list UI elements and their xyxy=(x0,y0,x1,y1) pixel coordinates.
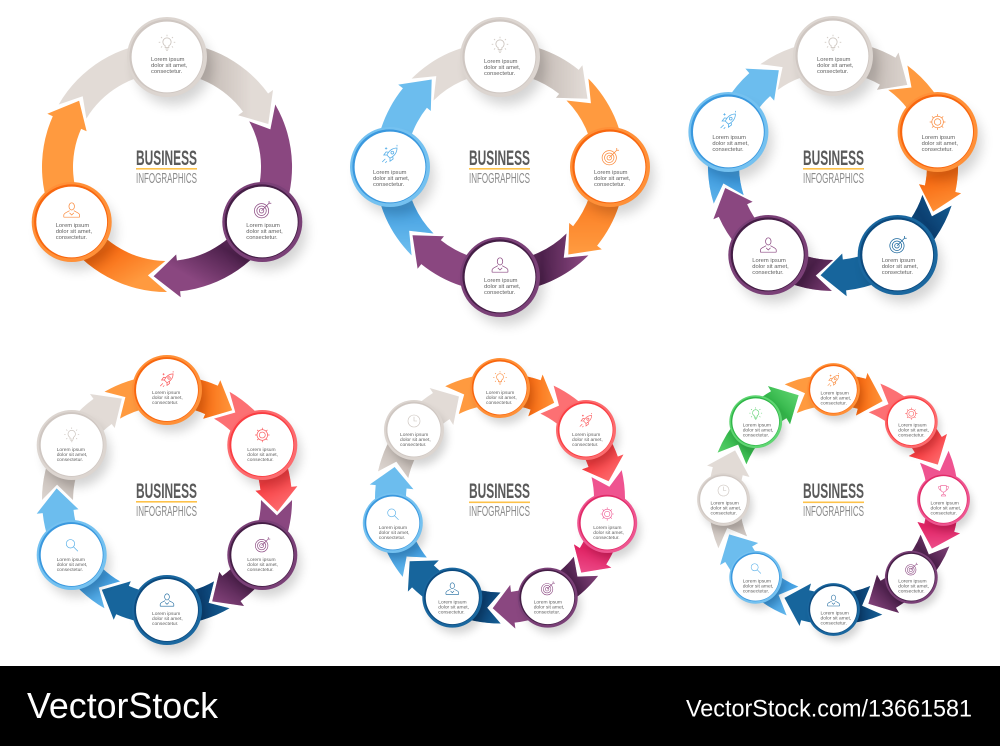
panel: six-step cycle xyxy=(26,355,308,652)
heading: business infographics: INFOGRAPHICS xyxy=(136,171,197,187)
node: rocket: dolor sit amet, xyxy=(820,396,851,402)
node: user: Lorem ipsum xyxy=(484,278,518,284)
node: bulb: consectetur. xyxy=(57,457,83,463)
node: clock: consectetur. xyxy=(710,510,737,516)
node: clock: dolor sit amet, xyxy=(710,506,741,512)
arrow ring: four arrows xyxy=(375,42,625,292)
node: clock xyxy=(697,473,753,531)
node: search: Lorem ipsum xyxy=(57,557,85,563)
image url text: VectorStock.com/13661581 xyxy=(686,696,972,722)
heading: business infographics: INFOGRAPHICS xyxy=(469,504,530,520)
node: target: dolor sit amet, xyxy=(882,264,918,270)
arrow ring: five arrows xyxy=(708,47,961,296)
node: bulb: consectetur. xyxy=(151,69,183,75)
node: bulb: Lorem ipsum xyxy=(743,423,771,429)
node: bulb: Lorem ipsum xyxy=(484,59,518,65)
node: gear: Lorem ipsum xyxy=(898,423,927,429)
node: bulb: consectetur. xyxy=(817,69,849,75)
node: user: dolor sit amet, xyxy=(152,616,183,622)
heading: business infographics: BUSINESS xyxy=(803,147,864,170)
node: rocket: Lorem ipsum xyxy=(152,390,180,396)
panel: four-step cycle xyxy=(350,17,654,325)
node: user xyxy=(32,182,116,270)
arrow: dark blue xyxy=(102,581,230,625)
node: user: Lorem ipsum xyxy=(820,610,849,616)
node: rocket: dolor sit amet, xyxy=(712,141,749,147)
heading: business infographics: BUSINESS xyxy=(803,480,864,503)
node: rocket: consectetur. xyxy=(152,400,178,406)
heading: business infographics: INFOGRAPHICS xyxy=(803,504,864,520)
node: user: Lorem ipsum xyxy=(752,258,786,264)
node: user xyxy=(460,237,544,325)
arrow: purple xyxy=(212,500,292,606)
node: target: Lorem ipsum xyxy=(247,557,276,563)
heading: business infographics: BUSINESS xyxy=(136,147,197,170)
node: gear: consectetur. xyxy=(247,457,274,463)
node: user: dolor sit amet, xyxy=(752,264,789,270)
arrow: light blue xyxy=(370,467,427,577)
node: target: consectetur. xyxy=(594,182,626,188)
arrow: beige xyxy=(760,47,908,90)
node: bulb xyxy=(729,395,785,453)
node: target: dolor sit amet, xyxy=(534,605,564,611)
node: target: consectetur. xyxy=(247,567,274,573)
node: search xyxy=(729,551,785,609)
brand text: VectorStock xyxy=(27,685,219,726)
arrow: beige xyxy=(412,48,588,100)
node: bulb: dolor sit amet, xyxy=(151,63,188,69)
node: rocket: consectetur. xyxy=(572,442,598,448)
arrow ring: six arrows xyxy=(36,380,298,620)
arrow: beige xyxy=(707,450,750,548)
node: gear: Lorem ipsum xyxy=(922,135,955,141)
node: target: Lorem ipsum xyxy=(898,578,927,584)
arrow: beige xyxy=(59,42,273,124)
node: rocket: consectetur. xyxy=(373,182,405,188)
footer bar xyxy=(0,666,1000,746)
node: user: consectetur. xyxy=(56,235,87,241)
node: rocket xyxy=(807,363,863,421)
arrow: dark blue xyxy=(408,560,501,624)
node: user xyxy=(807,583,863,641)
node: user: dolor sit amet, xyxy=(438,605,469,611)
arrow: red xyxy=(868,384,947,465)
arrow: purple xyxy=(858,524,957,624)
node: bulb xyxy=(470,358,533,424)
node: rocket: Lorem ipsum xyxy=(712,135,746,141)
node: bulb: dolor sit amet, xyxy=(57,452,87,458)
heading: business infographics xyxy=(469,147,530,187)
arrow: red xyxy=(540,386,624,482)
arrow: orange xyxy=(104,375,232,419)
heading: business infographics xyxy=(136,147,197,187)
node: gear xyxy=(577,493,640,559)
node: gear: dolor sit amet, xyxy=(922,141,958,147)
node: user xyxy=(728,215,812,303)
node: rocket: dolor sit amet, xyxy=(373,176,410,182)
heading: business infographics: INFOGRAPHICS xyxy=(136,504,197,520)
arrow: red xyxy=(214,392,298,512)
node: gear: dolor sit amet, xyxy=(593,530,624,536)
node: bulb: consectetur. xyxy=(743,433,769,439)
arrow: light blue xyxy=(709,524,809,623)
node: search: consectetur. xyxy=(57,567,83,573)
node: gear: dolor sit amet, xyxy=(898,428,929,434)
arrow: dark blue xyxy=(784,584,882,626)
node: search: Lorem ipsum xyxy=(379,525,407,531)
arrow: beige xyxy=(42,394,122,500)
arrow: orange xyxy=(785,373,883,416)
panel: five-step cycle xyxy=(688,16,982,311)
node: gear: consectetur. xyxy=(922,147,953,153)
node: gear: Lorem ipsum xyxy=(247,447,276,453)
node: target: consectetur. xyxy=(882,270,913,276)
node: user: Lorem ipsum xyxy=(56,223,89,229)
node: target: Lorem ipsum xyxy=(246,223,280,229)
node: gear xyxy=(898,92,982,180)
node: target xyxy=(570,127,654,215)
arrow: green xyxy=(710,375,809,475)
heading: business infographics xyxy=(136,480,197,520)
node: rocket: consectetur. xyxy=(712,147,744,153)
node: clock: Lorem ipsum xyxy=(710,500,739,506)
node: bulb: Lorem ipsum xyxy=(817,57,851,63)
node: rocket xyxy=(132,355,206,432)
node: user: consectetur. xyxy=(438,610,465,616)
node: target: dolor sit amet, xyxy=(246,229,283,235)
node: trophy: consectetur. xyxy=(930,510,957,516)
node: bulb: dolor sit amet, xyxy=(484,65,521,71)
node: user xyxy=(132,575,206,652)
arrow: dark blue xyxy=(820,195,952,296)
node: trophy: Lorem ipsum xyxy=(930,500,959,506)
node: user xyxy=(422,568,485,634)
node: user: dolor sit amet, xyxy=(820,616,851,622)
arrow: orange xyxy=(888,66,961,212)
node: rocket: consectetur. xyxy=(820,400,847,406)
arrow: orange xyxy=(445,374,554,416)
node: clock xyxy=(384,400,447,466)
heading: business infographics: BUSINESS xyxy=(469,147,530,170)
arrow ring: eight arrows xyxy=(707,373,960,626)
node: user: consectetur. xyxy=(752,270,784,276)
node: rocket: dolor sit amet, xyxy=(152,395,183,401)
arrow: orange xyxy=(42,100,167,292)
arrow ring: seven arrows xyxy=(366,374,634,635)
arrow: light blue xyxy=(708,68,779,204)
arrow: purple xyxy=(713,188,833,291)
node: bulb: consectetur. xyxy=(486,400,512,406)
node: search xyxy=(37,520,110,597)
heading: business infographics: INFOGRAPHICS xyxy=(803,171,864,187)
node: target xyxy=(227,520,301,597)
node: gear: consectetur. xyxy=(593,535,620,541)
node: bulb xyxy=(37,410,110,487)
node: user: dolor sit amet, xyxy=(56,229,92,235)
node: search: dolor sit amet, xyxy=(57,562,87,568)
node: rocket xyxy=(556,400,619,466)
node: gear: dolor sit amet, xyxy=(247,452,278,458)
node: target: dolor sit amet, xyxy=(594,176,631,182)
heading: business infographics xyxy=(469,480,530,520)
node: rocket xyxy=(688,92,772,180)
node: rocket: Lorem ipsum xyxy=(572,432,600,438)
node: bulb: Lorem ipsum xyxy=(151,57,185,63)
node: target: dolor sit amet, xyxy=(247,562,278,568)
node: search: dolor sit amet, xyxy=(743,583,773,589)
arrow: purple xyxy=(412,234,588,286)
node: bulb: consectetur. xyxy=(484,71,516,77)
heading: business infographics xyxy=(803,480,864,520)
arrow: beige xyxy=(378,388,459,478)
node: target xyxy=(518,568,581,634)
arrow: purple xyxy=(492,556,598,628)
node: target xyxy=(858,215,942,303)
heading: business infographics xyxy=(803,147,864,187)
panel: seven-step cycle xyxy=(363,358,640,635)
node: search: Lorem ipsum xyxy=(743,578,771,584)
heading: business infographics: BUSINESS xyxy=(469,480,530,503)
arrow: light blue xyxy=(36,488,120,608)
node: bulb: dolor sit amet, xyxy=(817,63,854,69)
node: user: consectetur. xyxy=(484,290,516,296)
arrow: pink xyxy=(574,470,625,573)
panel: three-step cycle xyxy=(32,17,311,298)
node: target xyxy=(885,551,940,609)
node: user: Lorem ipsum xyxy=(438,600,467,606)
node: gear: consectetur. xyxy=(898,433,925,439)
node: user: consectetur. xyxy=(820,620,847,626)
node: rocket: Lorem ipsum xyxy=(373,170,407,176)
node: bulb: dolor sit amet, xyxy=(486,395,517,401)
node: trophy: dolor sit amet, xyxy=(930,506,961,512)
node: gear xyxy=(227,410,301,487)
node: search: dolor sit amet, xyxy=(379,530,410,536)
node: user: Lorem ipsum xyxy=(152,611,180,617)
node: gear: Lorem ipsum xyxy=(593,525,621,531)
node: bulb: Lorem ipsum xyxy=(486,390,514,396)
node: bulb xyxy=(460,17,544,105)
node: target: consectetur. xyxy=(246,235,278,241)
arrow: orange xyxy=(566,78,619,254)
arrow: pink xyxy=(918,451,960,549)
node: target: Lorem ipsum xyxy=(882,258,915,264)
node: clock: Lorem ipsum xyxy=(400,432,428,438)
node: bulb: Lorem ipsum xyxy=(57,447,85,453)
heading: business infographics: INFOGRAPHICS xyxy=(469,171,530,187)
node: target: Lorem ipsum xyxy=(594,170,628,176)
arrow: purple xyxy=(154,104,292,298)
node: target: consectetur. xyxy=(898,588,925,594)
node: clock: dolor sit amet, xyxy=(400,437,431,443)
node: target: Lorem ipsum xyxy=(534,600,562,606)
node: rocket: Lorem ipsum xyxy=(820,390,849,396)
node: search xyxy=(363,493,426,559)
node: bulb xyxy=(793,16,877,104)
panel: eight-step cycle xyxy=(697,363,973,641)
node: search: consectetur. xyxy=(743,588,769,594)
arrow ring: three arrows xyxy=(42,48,292,298)
node: bulb xyxy=(127,17,211,105)
heading: business infographics: BUSINESS xyxy=(136,480,197,503)
node: target: consectetur. xyxy=(534,610,560,616)
node: rocket: dolor sit amet, xyxy=(572,437,603,443)
node: gear xyxy=(885,395,940,453)
node: trophy xyxy=(917,473,973,531)
node: user: consectetur. xyxy=(152,621,178,627)
node: clock: consectetur. xyxy=(400,442,426,448)
node: bulb: dolor sit amet, xyxy=(743,428,773,434)
node: search: consectetur. xyxy=(379,535,405,541)
node: target: dolor sit amet, xyxy=(898,583,929,589)
node: target xyxy=(222,182,306,270)
node: user: dolor sit amet, xyxy=(484,284,521,290)
arrow: light blue xyxy=(381,80,434,256)
node: rocket xyxy=(350,127,434,215)
